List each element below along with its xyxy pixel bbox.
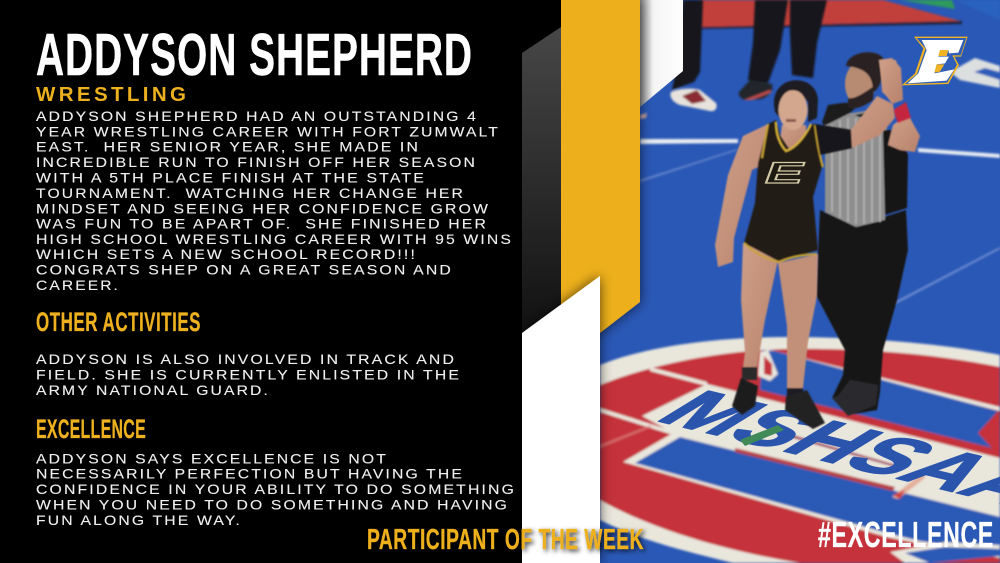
text block: excellence: WHEN YOU NEED TO DO SOMETHING AND HAVING bbox=[36, 496, 509, 512]
text block: excellence: FUN ALONG THE WAY. bbox=[36, 512, 242, 528]
photo: wrestler and referee on the mat bbox=[600, 0, 1000, 563]
text block: other activities: ADDYSON IS ALSO INVOLVED IN TRACK AND bbox=[36, 351, 456, 367]
text block: biography bbox=[36, 108, 513, 293]
text block: biography: YEAR WRESTLING CAREER WITH FORT ZUMWALT bbox=[36, 123, 500, 139]
text block: other activities: FIELD. SHE IS CURRENTLY ENLISTED IN THE bbox=[36, 366, 461, 382]
subtitle: sport: WRESTLING bbox=[36, 83, 186, 106]
text block: excellence bbox=[36, 450, 516, 528]
text block: biography: TOURNAMENT. WATCHING HER CHANGE HER bbox=[36, 185, 465, 201]
text block: biography: CAREER. bbox=[36, 277, 120, 293]
text block: biography: ADDYSON SHEPHERD HAD AN OUTSTANDING 4 bbox=[36, 108, 478, 124]
wrestler bbox=[715, 60, 902, 429]
text block: biography: HIGH SCHOOL WRESTLING CAREER WITH 95 WINS bbox=[36, 231, 513, 247]
background legs bbox=[640, 0, 827, 119]
logo: letter E bbox=[902, 37, 968, 85]
text block: excellence: NECESSARILY PERFECTION BUT HAVING THE bbox=[36, 466, 464, 482]
heading: other activities: OTHER ACTIVITIES bbox=[36, 307, 201, 337]
text block: biography: MINDSET AND SEEING HER CONFIDENCE GROW bbox=[36, 200, 490, 216]
text block: other activities bbox=[36, 351, 461, 398]
text block: excellence: CONFIDENCE IN YOUR ABILITY TO DO SOMETHING bbox=[36, 481, 516, 497]
white angled panel bottom bbox=[522, 276, 600, 563]
text block: biography: WAS FUN TO BE APART OF. SHE FINISHED HER bbox=[36, 216, 488, 232]
text block: biography: WHICH SETS A NEW SCHOOL RECORD!!! bbox=[36, 246, 417, 262]
title: ADDYSON SHEPHERD bbox=[36, 22, 473, 88]
heading: excellence: EXCELLENCE bbox=[36, 414, 146, 444]
referee bbox=[816, 52, 920, 416]
singlet letter: E bbox=[765, 157, 805, 190]
dark gradient angled panel bbox=[522, 27, 561, 333]
text block: biography: INCREDIBLE RUN TO FINISH OFF HER SEASON bbox=[36, 154, 477, 170]
tape on mat bbox=[740, 425, 784, 446]
gold angled panel bbox=[561, 0, 640, 333]
footer label: participant of the week: PARTICIPANT OF THE WEEK bbox=[367, 524, 644, 556]
text block: other activities: ARMY NATIONAL GUARD. bbox=[36, 382, 270, 398]
black background panel bbox=[0, 0, 640, 563]
white angled panel top bbox=[640, 0, 683, 107]
mat lettering: MSHSAA bbox=[637, 380, 1000, 516]
text block: biography: CONGRATS SHEP ON A GREAT SEASON AND bbox=[36, 262, 453, 278]
text block: biography: WITH A 5TH PLACE FINISH AT THE STATE bbox=[36, 170, 426, 186]
text block: excellence: ADDYSON SAYS EXCELLENCE IS NOT bbox=[36, 450, 388, 466]
mat and logo bbox=[600, 0, 1000, 563]
text block: biography: EAST. HER SENIOR YEAR, SHE MADE IN bbox=[36, 139, 420, 155]
